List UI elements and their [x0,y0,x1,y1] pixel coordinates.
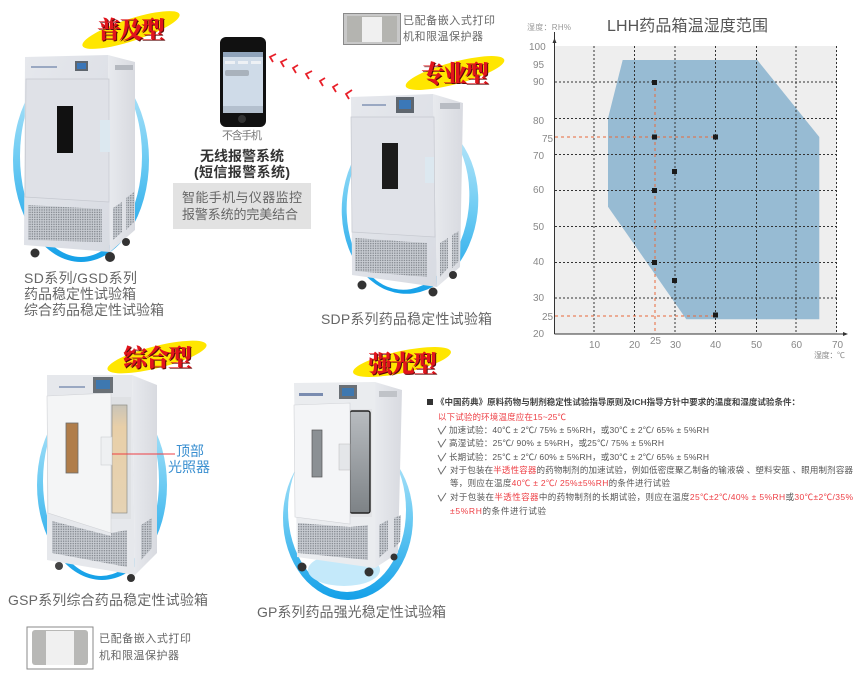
printer note: 已配备嵌入式打印 [403,13,495,27]
callout: top illuminator: 光照器 [168,459,210,475]
y axis labels: 25 [542,312,554,323]
phone note: 不含手机 [222,128,262,142]
test condition markers [652,80,718,318]
caption: SD series: 药品稳定性试验箱 [24,286,136,302]
caption: SD series: SD系列/GSD系列 [24,270,137,286]
y axis labels: 70 [533,151,545,162]
caption: GSP series: GSP系列综合药品稳定性试验箱 [8,592,208,608]
x axis labels: 40 [710,340,722,351]
y axis labels: 30 [533,293,545,304]
panel: GSP series cabinet [8,334,210,669]
blue ring [13,55,149,262]
heading: wireless alarm system: (短信报警系统) [194,164,290,180]
x axis labels: 50 [751,340,763,351]
badge: 普及型 [79,4,183,56]
y axis labels: 95 [533,60,545,71]
printer thumbnail [344,14,400,44]
badge: 专业型: 专业型 [421,60,489,88]
chart title: LHH药品箱温湿度范围 [607,17,768,35]
conditions heading: 《中国药典》原料药物与制剂稳定性试验指导原则及ICH指导方针中要求的温度和湿度试验条件： [436,397,800,407]
heading: wireless alarm system: 无线报警系统 [200,148,284,164]
callout: top illuminator [112,443,210,475]
grid lines [555,46,837,334]
plot background [555,46,837,334]
condition list [449,425,853,516]
badge: 强光型: 强光型 [368,351,437,378]
arrows: wireless signal chevrons [270,54,352,99]
cabinet [24,55,135,262]
condition list: 对于包装在半透性容器的药物制剂的加速试验，例如低密度聚乙制备的输液袋 、塑料安瓿 、眼用制剂容器 [450,465,853,475]
y axis labels: 50 [533,222,545,233]
badge: 综合型 [105,334,209,380]
y axis labels: 90 [533,77,545,88]
y axis labels: 40 [533,257,545,268]
x axis title: 湿度：℃ [814,350,845,360]
y axis labels: 60 [533,185,545,196]
x axis labels: 70 [832,340,844,351]
printer note: 机和限温保护器 [403,29,483,43]
x axis labels [589,336,844,351]
y axis labels: 100 [529,42,546,53]
icon: smartphone [220,37,266,127]
printer note: 机和限温保护器 [99,648,179,662]
x axis labels: 25 [650,336,662,347]
x axis labels: 10 [589,340,601,351]
condition list: 高湿试验：25℃/ 90% ± 5%RH，或25℃/ 75% ± 5%RH [449,438,664,448]
printer note: 已配备嵌入式打印 [99,631,191,645]
panel: SDP series cabinet [321,13,507,327]
reference lines at 25 °C, 75 % and 25 % [555,82,715,334]
badge: 专业型 [403,49,507,97]
badge: 普及型: 普及型 [97,17,165,44]
check marks [438,426,446,501]
x axis labels: 60 [791,340,803,351]
y axis labels: 20 [533,329,545,340]
y axis labels: 80 [533,116,545,127]
panel: test conditions text [427,397,853,516]
x axis labels: 30 [670,340,682,351]
blue ring [37,386,167,580]
caption: GP series: GP系列药品强光稳定性试验箱 [257,604,446,620]
printer note [99,631,191,662]
callout: grey description box: 报警系统的完美结合 [182,207,298,222]
caption: SDP series: SDP系列药品稳定性试验箱 [321,311,492,327]
bullet square [427,399,433,405]
caption: SD series: 综合药品稳定性试验箱 [24,302,164,318]
condition list: 加速试验：40℃ ± 2℃/ 75% ± 5%RH，或30℃ ± 2℃/ 65% ± 5%RH [449,425,709,435]
callout: top illuminator: 顶部 [176,443,204,459]
badge: 强光型 [351,341,453,383]
panel: wireless alarm [173,37,352,229]
condition list: 对于包装在半透性容器中的药物制剂的长期试验，则应在温度25℃±2℃/40% ± 5%RH或30℃±2℃/35% [450,492,853,502]
x axis labels: 20 [629,340,641,351]
cabinet [294,382,402,576]
badge: 综合型: 综合型 [123,345,192,372]
heading: wireless alarm system [194,148,290,180]
y axis title: 湿度：RH% [527,22,571,32]
blue ring [283,428,413,600]
panel: humidity temperature chart [527,17,848,360]
panel: GP series cabinet [257,341,453,620]
blue ring [333,108,487,301]
temperature note: 以下试验的环境温度应在15~25℃ [438,412,566,422]
operating range polygon [608,60,819,319]
printer note [403,13,495,43]
y axis labels: 75 [542,134,554,145]
callout: grey description box: 智能手机与仪器监控 [182,190,302,205]
panel: SD series cabinet [13,4,183,318]
cabinet [47,375,157,582]
y axis labels [529,42,554,340]
condition list: 等，则应在温度40℃ ± 2℃/ 25%±5%RH的条件进行试验 [450,478,670,488]
caption: SD series [24,270,164,318]
axes [552,32,848,336]
printer thumbnail [27,627,93,669]
condition list: 长期试验：25℃ ± 2℃/ 60% ± 5%RH，或30℃ ± 2℃/ 65% ± 5%RH [449,452,709,462]
cabinet [351,94,463,296]
callout: grey description box [173,183,311,229]
condition list: ±5%RH的条件进行试验 [450,506,546,516]
